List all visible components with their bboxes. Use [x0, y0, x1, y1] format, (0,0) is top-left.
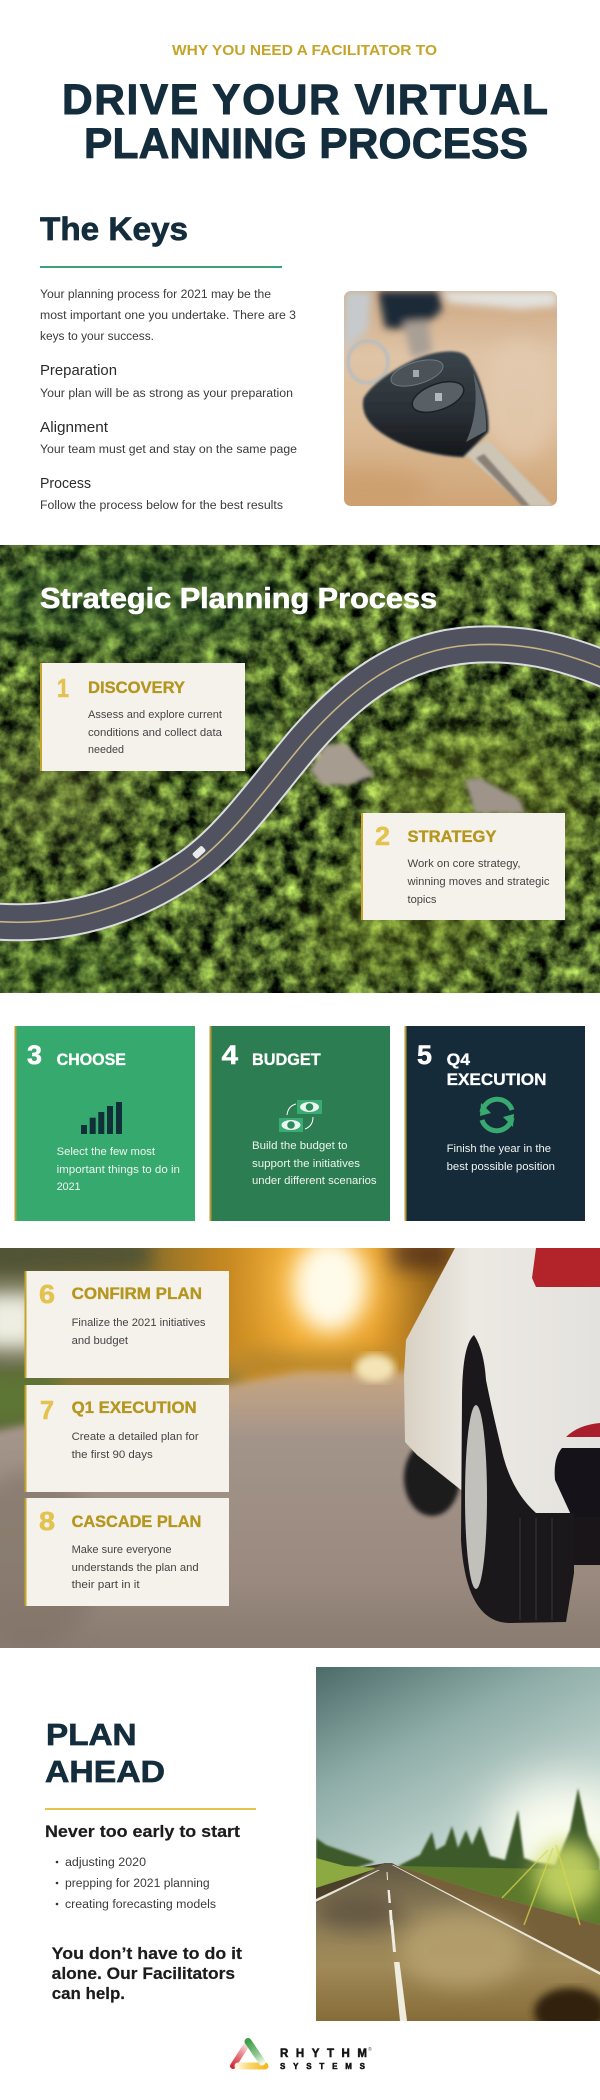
- left hillside: [316, 1858, 378, 1888]
- wheel arch and rear tyre: [461, 1335, 574, 1623]
- tonal patches: [0, 550, 590, 1000]
- card 4: budget: support the initiatives: [252, 1158, 361, 1170]
- eyebrow heading: WHY YOU NEED A FACILITATOR TO: [172, 42, 437, 59]
- card 6: confirm plan: [24, 1271, 229, 1378]
- bullet list: creating forecasting models: [65, 1899, 216, 1911]
- treeline: [316, 1788, 600, 1925]
- card 3: choose: 3: [27, 1040, 42, 1070]
- card 7: Q1 execution: 7: [40, 1395, 54, 1425]
- call to action: [52, 1944, 242, 2003]
- card 2: strategy: 2: [375, 821, 390, 851]
- winding road: [0, 644, 600, 922]
- card 3: choose: CHOOSE: [57, 1050, 126, 1069]
- card 7: Q1 execution: [24, 1385, 229, 1492]
- card 6: confirm plan: Finalize the 2021 initiatives: [72, 1317, 206, 1329]
- background blur: [0, 1248, 455, 1436]
- card 2: strategy: STRATEGY: [408, 827, 497, 846]
- forest texture: [0, 545, 600, 993]
- key: alignment: Alignment: [40, 419, 109, 436]
- card 2: strategy: Work on core strategy,: [408, 858, 520, 870]
- card 8: cascade plan: understands the plan and: [72, 1562, 199, 1574]
- panel: the keys text: [40, 211, 297, 512]
- icon: cycle arrows: [480, 1099, 514, 1131]
- card 2: strategy: winning moves and strategic: [406, 876, 550, 888]
- green rule: [40, 266, 282, 268]
- card 4: budget: 4: [222, 1040, 238, 1070]
- blurred road surface: [0, 1372, 600, 1670]
- logo: rhythm systems: [233, 2042, 372, 2071]
- card 5: Q4 execution: [404, 1026, 585, 1221]
- card 6: confirm plan: 6: [39, 1279, 55, 1309]
- intro paragraph: keys to your success.: [40, 331, 154, 343]
- panel: strategic planning process forest background: [0, 545, 600, 1000]
- card 2: strategy: topics: [408, 894, 437, 906]
- road lines: [316, 1870, 380, 1902]
- bullet list: prepping for 2021 planning: [65, 1878, 210, 1890]
- card 2: strategy: [361, 813, 565, 920]
- key: process: [40, 475, 283, 512]
- title: DRIVE YOUR VIRTUAL: [62, 77, 548, 124]
- icon: bar chart: [81, 1102, 122, 1134]
- heading: plan ahead: PLAN: [46, 1717, 137, 1752]
- card 4: budget: under different scenarios: [252, 1175, 377, 1187]
- card 1: discovery: needed: [88, 744, 124, 756]
- car body: [404, 1248, 600, 1520]
- card 1: discovery: conditions and collect data: [88, 727, 223, 739]
- logo wordmark: RHYTHM: [280, 2048, 367, 2060]
- card 1: discovery: [40, 663, 245, 771]
- panel: plan ahead text: [45, 1717, 256, 2003]
- key: preparation: [40, 362, 293, 400]
- card 1: discovery: 1: [57, 673, 69, 703]
- subheading: Never too early to start: [45, 1822, 240, 1841]
- intro paragraph: Your planning process for 2021 may be the: [40, 289, 271, 301]
- sun rays: [502, 1845, 580, 1925]
- call to action: can help.: [52, 1984, 125, 2003]
- left shoulder: [316, 1863, 386, 1905]
- tail light: [532, 1248, 600, 1287]
- card 3: choose: Select the few most: [57, 1146, 155, 1158]
- right shoulder: [398, 1866, 600, 1975]
- card 8: cascade plan: CASCADE PLAN: [72, 1512, 201, 1531]
- title: [62, 77, 548, 168]
- card 8: cascade plan: [24, 1498, 229, 1606]
- bullet list: adjusting 2020: [65, 1857, 146, 1869]
- key: process: Follow the process below for the best results: [40, 500, 283, 512]
- card 5: Q4 execution: Q4: [447, 1050, 471, 1069]
- card 8: cascade plan: Make sure everyone: [72, 1544, 172, 1556]
- key: preparation: Your plan will be as strong as your preparation: [40, 388, 293, 400]
- heading: plan ahead: AHEAD: [45, 1754, 165, 1789]
- rocks: [308, 740, 527, 813]
- card 8: cascade plan: 8: [39, 1506, 55, 1536]
- card 1: discovery: DISCOVERY: [88, 678, 186, 697]
- card 6: confirm plan: CONFIRM PLAN: [72, 1284, 202, 1303]
- logo mark: [233, 2042, 265, 2066]
- card 4: budget: Build the budget to: [252, 1140, 348, 1152]
- key: alignment: Your team must get and stay on the same page: [40, 444, 297, 456]
- card 5: Q4 execution: best possible position: [447, 1161, 555, 1173]
- rim: [465, 1405, 487, 1589]
- intro paragraph: [40, 289, 296, 343]
- card 7: Q1 execution: the first 90 days: [72, 1449, 153, 1461]
- gold rule: [45, 1808, 256, 1810]
- card 8: cascade plan: their part in it: [72, 1579, 140, 1591]
- bullet list: [56, 1857, 216, 1911]
- heading: strategic planning process: Strategic Planning Process: [40, 583, 437, 615]
- road surface: [316, 1863, 600, 2021]
- card 3: choose: [14, 1026, 195, 1221]
- heading: plan ahead: [45, 1717, 165, 1789]
- card 5: Q4 execution: EXECUTION: [447, 1070, 546, 1089]
- card 5: Q4 execution: 5: [417, 1040, 432, 1070]
- bumper: [555, 1448, 600, 1519]
- key: process: Process: [40, 475, 91, 492]
- key: preparation: Preparation: [40, 362, 117, 379]
- tread lines: [520, 1518, 552, 1620]
- call to action: You don’t have to do it: [52, 1944, 242, 1963]
- heading: the keys: The Keys: [40, 211, 188, 247]
- logo wordmark: SYSTEMS: [280, 2062, 366, 2071]
- logo wordmark: [280, 2048, 367, 2071]
- card 5: Q4 execution: Finish the year in the: [447, 1143, 551, 1155]
- front wheel: [404, 1440, 460, 1516]
- reflector: [566, 1423, 600, 1437]
- card 3: choose: important things to do in: [57, 1164, 180, 1176]
- photo: open road at sunrise: [313, 1667, 600, 2036]
- photo: car key on wood table: [344, 291, 557, 506]
- call to action: alone. Our Facilitators: [52, 1964, 235, 1983]
- card 6: confirm plan: and budget: [72, 1335, 128, 1347]
- card 1: discovery: Assess and explore current: [88, 709, 222, 721]
- card 4: budget: [210, 1026, 390, 1221]
- card 4: budget: BUDGET: [252, 1050, 321, 1069]
- card 3: choose: 2021: [57, 1181, 81, 1193]
- intro paragraph: most important one you undertake. There are 3: [40, 310, 296, 322]
- key: alignment: [40, 419, 297, 456]
- logo: rhythm systems: ®: [368, 2046, 372, 2053]
- icon: money exchange: [279, 1100, 322, 1132]
- card 7: Q1 execution: Create a detailed plan for: [72, 1431, 199, 1443]
- car on road: [192, 846, 206, 858]
- title: PLANNING PROCESS: [84, 121, 528, 168]
- card 7: Q1 execution: Q1 EXECUTION: [72, 1398, 197, 1417]
- panel: car on road photo: [0, 1233, 600, 1670]
- right greenery: [398, 1866, 600, 1925]
